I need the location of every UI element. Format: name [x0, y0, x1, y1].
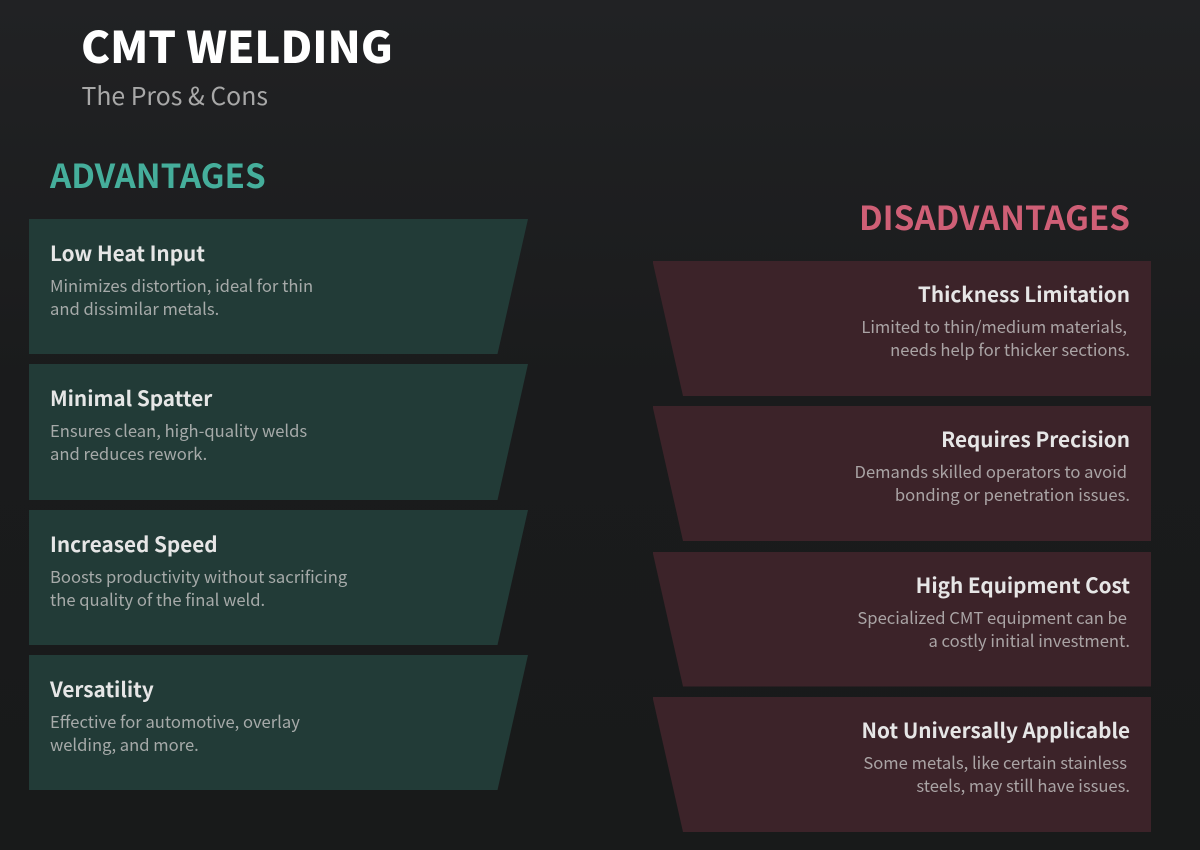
- panel: low heat input: Low Heat Input: [50, 237, 205, 267]
- panel: thickness limitation: [652, 261, 1151, 396]
- panel: minimal spatter: and reduces rework.: [50, 441, 207, 465]
- panel: not universally applicable: Some metals, like certain stainless: [863, 750, 1127, 774]
- title: CMT WELDING: [81, 12, 393, 76]
- subtitle: The Pros & Cons: [82, 77, 268, 113]
- heading: disadvantages: DISADVANTAGES: [859, 191, 1130, 240]
- panel: requires precision: Requires Precision: [941, 423, 1130, 453]
- panel: versatility: [29, 655, 528, 790]
- panel: versatility: Versatility: [50, 673, 154, 703]
- panel: requires precision: Demands skilled operators to avoid: [855, 459, 1127, 483]
- panel: not universally applicable: [652, 697, 1151, 832]
- panel: high equipment cost: [652, 552, 1151, 686]
- panel: increased speed: [29, 510, 528, 645]
- panel: low heat input: Minimizes distortion, ideal for thin: [50, 273, 313, 297]
- panel: requires precision: [652, 406, 1151, 541]
- panel: thickness limitation: Thickness Limitation: [918, 278, 1130, 308]
- panel: minimal spatter: [29, 364, 528, 500]
- panel: versatility: welding, and more.: [50, 732, 199, 756]
- panel: low heat input: and dissimilar metals.: [50, 296, 219, 320]
- heading: advantages: ADVANTAGES: [50, 149, 266, 198]
- panel: high equipment cost: High Equipment Cost: [916, 568, 1130, 598]
- panel: increased speed: Increased Speed: [50, 528, 218, 558]
- panel: increased speed: the quality of the final weld.: [50, 587, 265, 611]
- panel: high equipment cost: Specialized CMT equipment can be: [857, 604, 1127, 628]
- panel: thickness limitation: Limited to thin/medium materials,: [861, 314, 1127, 338]
- panel: minimal spatter: Minimal Spatter: [50, 382, 212, 412]
- panel: versatility: Effective for automotive, overlay: [50, 709, 300, 733]
- panel: increased speed: Boosts productivity without sacrificing: [50, 564, 347, 588]
- panel: minimal spatter: Ensures clean, high-quality welds: [50, 418, 307, 442]
- panel: low heat input: [29, 219, 528, 354]
- panel: thickness limitation: needs help for thicker sections.: [890, 337, 1130, 361]
- panel: requires precision: bonding or penetration issues.: [895, 482, 1130, 506]
- panel: high equipment cost: a costly initial investment.: [928, 628, 1130, 652]
- panel: not universally applicable: steels, may still have issues.: [916, 773, 1130, 797]
- panel: not universally applicable: Not Universally Applicable: [862, 714, 1130, 744]
